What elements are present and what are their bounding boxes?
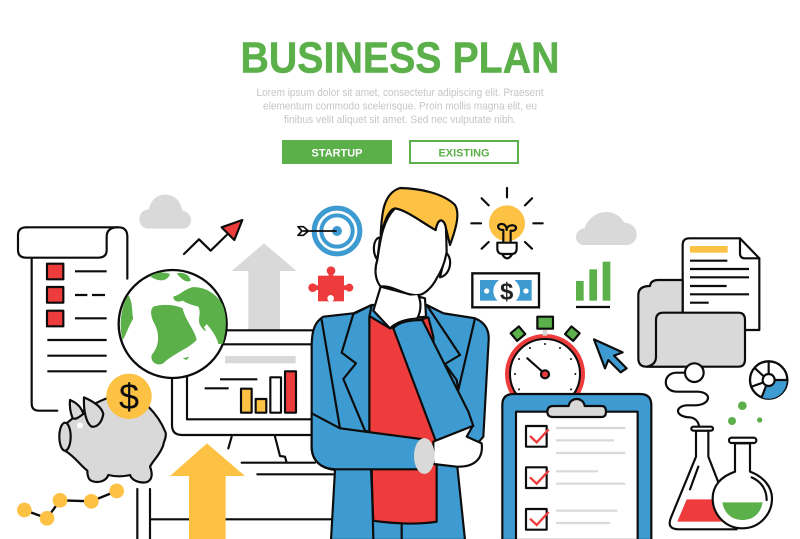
icon: globe [119, 270, 227, 378]
scroll document [18, 227, 127, 411]
green bubbles [728, 401, 762, 425]
line chart dots [17, 484, 124, 526]
bar chart [241, 371, 296, 413]
right ear [440, 253, 450, 277]
icon: light bulb [471, 188, 543, 258]
icon: conical flask [670, 427, 737, 529]
monitor [137, 330, 335, 539]
left ear [374, 237, 380, 260]
centre illustration group [298, 188, 543, 539]
icon: gray up arrow [232, 243, 297, 330]
man [312, 188, 489, 539]
title: BUSINESS PLAN [240, 35, 560, 83]
finger line [417, 295, 420, 318]
raised arm [393, 320, 473, 441]
checklist squares [47, 264, 63, 326]
left illustration group [17, 195, 335, 539]
icon: pie chart [750, 361, 787, 399]
connecting tube [666, 363, 708, 427]
button: startup [282, 140, 392, 164]
button: existing [410, 141, 518, 163]
intro text: Lorem ipsum dolor sit amet, consectetur adipiscing elit. Praesent [256, 87, 544, 99]
clipboard [502, 394, 651, 539]
icon: green bar chart [576, 262, 610, 307]
folder [638, 280, 745, 367]
jacket [312, 305, 489, 539]
icon: cloud left [139, 195, 191, 229]
icon: round flask [713, 438, 772, 528]
cuff [414, 438, 435, 474]
icon: cloud right [576, 212, 637, 245]
red shirt [369, 316, 437, 524]
icon: banknote [472, 273, 539, 307]
button: startup: STARTUP [312, 147, 362, 159]
face [376, 208, 447, 295]
icon: banknote: $ [500, 278, 513, 305]
icon: yellow up arrow [170, 443, 245, 539]
hair [381, 188, 457, 245]
intro text: elementum commodo scelerisque. Proin mollis magna elit, eu [263, 100, 537, 112]
intro text: finibus velit aliquet sit amet. Sed nec vulputate nibh. [284, 114, 516, 126]
hand on chin [394, 295, 421, 324]
checklist lines [556, 428, 625, 523]
icon: puzzle piece [308, 266, 353, 302]
clipboard clip [547, 399, 606, 417]
icon: cursor arrow [594, 339, 627, 372]
neck [373, 287, 426, 328]
hand [433, 426, 482, 467]
button: existing: EXISTING [438, 147, 490, 159]
jacket lapels [342, 305, 372, 432]
icon: stopwatch [505, 317, 585, 414]
right illustration group [502, 212, 787, 539]
icon: dollar coin: $ [119, 376, 139, 417]
icon: target [298, 208, 360, 254]
checkboxes [526, 426, 549, 530]
icon: trend arrow [184, 220, 242, 254]
document [683, 238, 759, 330]
intro text [256, 87, 544, 126]
icon: piggy bank [59, 374, 166, 483]
crossed sleeve [312, 413, 423, 469]
